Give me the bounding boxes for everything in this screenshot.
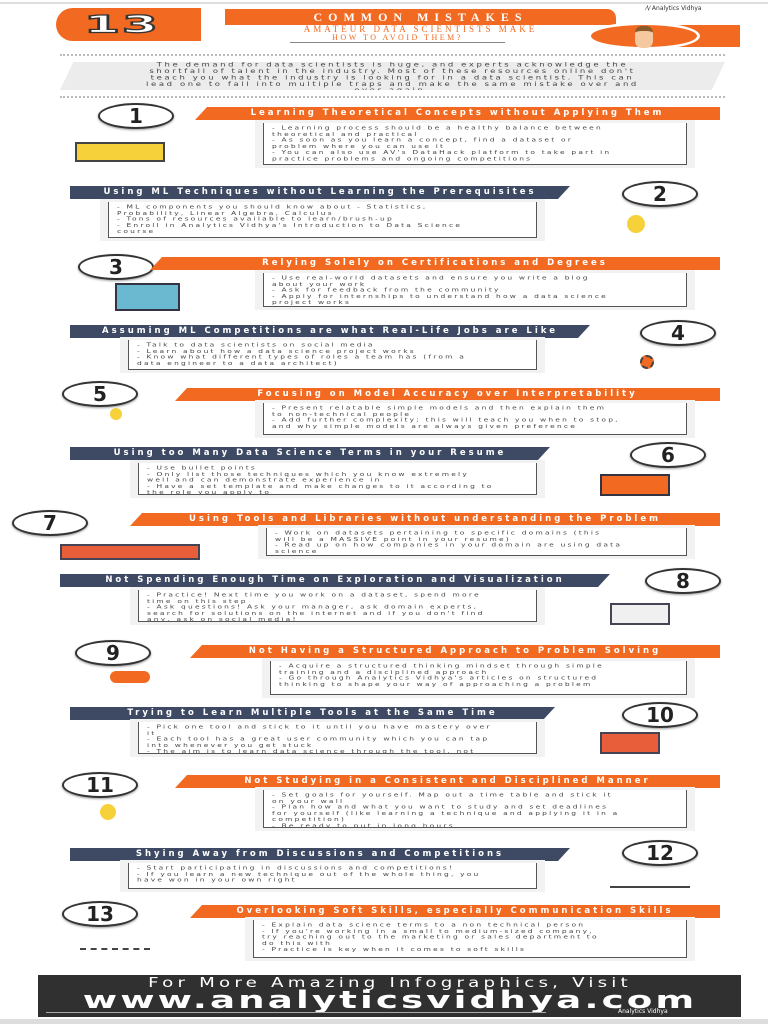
section 1	[75, 102, 720, 168]
text 6	[130, 460, 545, 498]
text 4	[120, 337, 545, 373]
heading 2: Using ML Techniques without Learning the Prerequisites	[103, 187, 537, 197]
text 12: - If you learn a new technique out of the whole thing, you have won in your own right	[137, 870, 480, 883]
header banner: AMATEUR DATA SCIENTISTS MAKE	[304, 24, 537, 34]
number 10	[622, 702, 698, 728]
text 10: - Each tool has a great user community which you can tap into whenever you get stuck	[147, 736, 489, 748]
text 3: - Ask for feedback from the community	[272, 287, 501, 293]
icon: head bulb	[100, 804, 116, 820]
heading 12	[70, 848, 570, 861]
text 6: - Use bullet points	[147, 464, 257, 471]
number 9	[75, 640, 151, 666]
section 7	[10, 510, 720, 560]
footer: Analytics Vidhya	[618, 1008, 668, 1015]
heading 12: Shying Away from Discussions and Competitions	[136, 849, 504, 859]
footer: www.analyticsvidhya.com	[83, 986, 697, 1014]
icon: charts	[610, 603, 670, 625]
text 13: - If you're working in a small to medium-sized company, try reaching out to the marketing or sales department to do this with	[262, 927, 599, 946]
number 1: 1	[129, 104, 143, 128]
text 8: - Practice! Next time you work on a dataset, spend more time on this step	[147, 591, 481, 604]
text 6: - Only list those techniques which you know extremely well and can demonstrate experience in	[147, 470, 469, 483]
text 7	[258, 525, 695, 559]
heading 5	[175, 388, 720, 401]
icon: brain	[110, 671, 150, 683]
number 1	[98, 103, 174, 129]
heading 13	[190, 905, 720, 918]
heading 2	[70, 186, 570, 199]
number 12	[622, 840, 698, 866]
text 3: - Apply for internships to understand how a data science project works	[272, 293, 608, 306]
logo: analytics vidhya header: ⁄\⁄ Analytics Vidhya	[646, 5, 702, 12]
text 4: - Talk to data scientists on social media	[137, 341, 375, 348]
number 13	[62, 901, 138, 927]
number 5	[62, 381, 138, 407]
number 10: 10	[646, 703, 674, 727]
heading 7	[130, 513, 720, 526]
text 2: - Tons of resources available to learn/brush-up	[117, 216, 394, 222]
icon: monitor	[600, 732, 660, 754]
heading 3: Relying Solely on Certifications and Degrees	[262, 258, 608, 268]
footer	[38, 975, 741, 1017]
heading 9	[190, 645, 720, 658]
text 7: - Read up on how companies in your domain are using data science	[275, 542, 622, 554]
number 12: 12	[646, 841, 674, 865]
text 7: - Work on datasets pertaining to specific domains (this will be a MASSIVE point in your resume)	[275, 529, 601, 542]
text 12: - Start participating in discussions and competitions!	[137, 864, 454, 871]
number 13: 13	[86, 902, 114, 926]
text 10	[130, 719, 545, 757]
heading 3	[150, 257, 720, 270]
text 2	[100, 199, 545, 241]
text 12	[120, 860, 545, 892]
number 13	[56, 8, 201, 41]
section 11	[60, 772, 720, 831]
heading 5: Focusing on Model Accuracy over Interpretability	[257, 389, 638, 399]
heading 10: Trying to Learn Multiple Tools at the Same Time	[127, 708, 498, 718]
text 11: - Plan how and what you want to study and set deadlines for yourself (like learning a technique and applying it in a competition)	[272, 804, 619, 823]
heading 13: Overlooking Soft Skills, especially Communication Skills	[236, 906, 674, 916]
number 7	[12, 510, 88, 536]
heading 1: Learning Theoretical Concepts without Applying Them	[251, 108, 664, 118]
section 5	[60, 380, 720, 438]
heading 8	[60, 574, 610, 587]
text 3: - Use real-world datasets and ensure you write a blog about your work	[272, 274, 590, 287]
text 5	[255, 400, 695, 438]
heading 1	[195, 107, 720, 120]
text 1: - Learning process should be a healthy balance between theoretical and practical	[272, 124, 603, 137]
heading 4: Assuming ML Competitions are what Real-Life Jobs are Like	[102, 326, 558, 336]
number 6: 6	[661, 443, 675, 467]
text 4: - Know what different types of roles a team has (from a data engineer to a data architect)	[137, 354, 466, 366]
text 5: - Add further complexity; this will teach you when to stop, and why simple models are always given preference	[272, 417, 620, 429]
number 8: 8	[676, 569, 690, 593]
icon: bulb	[627, 215, 645, 233]
heading 11	[175, 775, 720, 788]
section 6	[70, 442, 708, 498]
text 8: - Ask questions! Ask your manager, ask domain experts, search for solutions on the internet and if you don't find any, ask on social media!	[147, 604, 485, 622]
text 11	[255, 787, 695, 831]
number 3	[78, 254, 154, 280]
divider	[60, 54, 725, 56]
heading 7: Using Tools and Libraries without understanding the Problem	[189, 514, 661, 524]
section 8	[60, 568, 722, 625]
icon: screen	[115, 283, 180, 311]
icon: person avatar	[600, 25, 740, 47]
header banner: HOW TO AVOID THEM?	[332, 33, 463, 42]
text 13	[245, 917, 695, 961]
number 2: 2	[653, 182, 667, 206]
text 1	[255, 120, 695, 168]
text 1: - You can also use AV's DataHack platform to take part in practice problems and ongoing competitions	[272, 149, 611, 162]
footer: For More Amazing Infographics, Visit	[148, 976, 632, 991]
title: COMMON MISTAKES	[313, 10, 528, 24]
text 1: - As soon as you learn a concept, find a dataset or problem where you can use it	[272, 137, 573, 149]
section 9	[74, 640, 720, 698]
heading 9: Not Having a Structured Approach to Problem Solving	[249, 646, 661, 656]
number 9: 9	[106, 641, 120, 665]
icon: head gears	[640, 355, 654, 369]
icon: communication	[80, 936, 150, 950]
section 3	[76, 254, 720, 311]
text 11: - Set goals for yourself. Map out a time table and stick it on your wall	[272, 791, 613, 804]
icon: browser	[600, 474, 670, 496]
heading 10	[70, 707, 555, 720]
number 4: 4	[671, 321, 685, 345]
text 9: - Go through Analytics Vidhya's articles on structured thinking to shape your way of approaching a problem	[279, 675, 598, 687]
section 13	[60, 900, 720, 961]
heading 6	[70, 447, 550, 460]
number 2	[622, 181, 698, 207]
section 12	[70, 840, 700, 892]
text 2: - ML components you should know about - Statistics, Probability, Linear Algebra, Calculus	[117, 203, 427, 216]
number 6	[630, 442, 706, 468]
text 13: - Explain data science terms to a non technical person	[262, 921, 585, 928]
text 13: - Practice is key when it comes to soft skills	[262, 946, 526, 953]
text 9	[262, 658, 695, 698]
number 3: 3	[109, 255, 123, 279]
number 7: 7	[43, 511, 57, 535]
text 4: - Learn about how a data science project works	[137, 347, 416, 354]
title	[225, 9, 616, 25]
icon: people	[610, 868, 690, 888]
number 8	[645, 568, 721, 594]
section 4	[70, 320, 718, 373]
section 2	[70, 180, 700, 241]
heading 6: Using too Many Data Science Terms in your Resume	[114, 448, 506, 458]
number 11	[62, 772, 138, 798]
top rule	[0, 2, 768, 4]
icon: laptop	[75, 142, 165, 162]
heading 4	[70, 325, 590, 338]
text 10: - Pick one tool and stick to it until you have mastery over it	[147, 723, 492, 736]
text 5: - Present relatable simple models and then explain them to non-technical people	[272, 404, 606, 417]
heading 11: Not Studying in a Consistent and Disciplined Manner	[244, 776, 651, 786]
text 9: - Acquire a structured thinking mindset through simple training and a disciplined approach	[279, 662, 604, 675]
number 5: 5	[93, 382, 107, 406]
text 3	[255, 270, 695, 310]
text 8	[130, 587, 545, 625]
section 10	[70, 702, 700, 757]
text 2: - Enroll in Analytics Vidhya's Introduction to Data Science course	[117, 222, 462, 235]
number 4	[640, 320, 716, 346]
number 13: 13	[84, 10, 160, 39]
header banner	[56, 8, 740, 48]
icon: bulb 5	[110, 408, 122, 420]
number 11: 11	[86, 773, 114, 797]
heading 8: Not Spending Enough Time on Exploration and Visualization	[105, 575, 565, 585]
icon: workspace	[60, 544, 200, 560]
